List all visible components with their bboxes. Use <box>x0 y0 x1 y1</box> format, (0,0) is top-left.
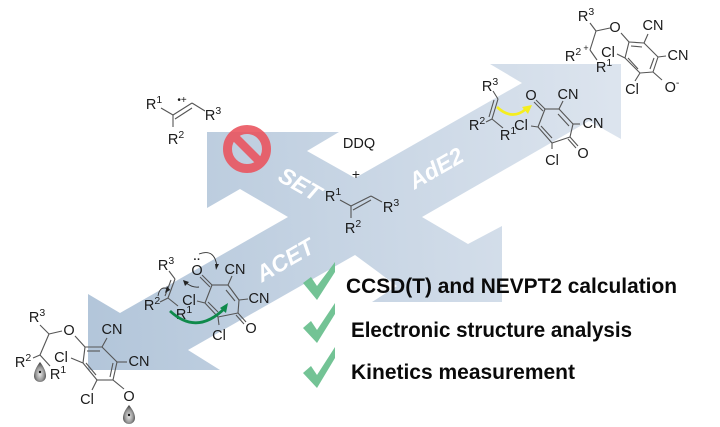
central alkene <box>325 186 399 237</box>
green curved arrow <box>170 303 228 323</box>
electronic structure text: Electronic structure analysis <box>351 319 632 342</box>
central alkene: R <box>325 189 335 205</box>
radical orbital lobe: oxygen <box>123 405 135 424</box>
DDQ complex, ACET path: CN <box>225 262 245 278</box>
AdE2 product: 2 <box>575 46 581 58</box>
DDQ complex, AdE2 path: 2 <box>479 115 485 127</box>
radical orbital lobe: alkyl <box>34 362 46 382</box>
AdE2 product: CN <box>668 48 688 64</box>
DDQ complex, ACET path: R <box>144 298 154 314</box>
plus sign: + <box>352 166 360 182</box>
ACET product: O <box>63 323 75 339</box>
three-way reaction arrows <box>88 64 621 370</box>
AdE2 product: O <box>665 80 676 96</box>
radical cation alkene: 2 <box>178 129 184 141</box>
DDQ complex, AdE2 path: R <box>469 118 479 134</box>
DDQ complex, AdE2 path: 3 <box>492 76 498 88</box>
ACET product: R <box>29 310 39 326</box>
DDQ complex, AdE2 path: R <box>482 79 492 95</box>
radical cation alkene: 3 <box>215 105 221 117</box>
small electron-pushing arrows <box>158 253 219 296</box>
DDQ complex, ACET path: R <box>158 258 168 274</box>
radical cation alkene: R <box>205 108 215 124</box>
DDQ complex, ACET path: 1 <box>186 304 192 316</box>
DDQ complex, ACET path: CN <box>249 291 269 307</box>
AdE2 product: 3 <box>588 6 594 18</box>
ACET product: Cl <box>54 350 68 366</box>
radical cation alkene <box>146 94 221 148</box>
DDQ complex, AdE2 path: CN <box>558 87 578 103</box>
DDQ complex, AdE2 path: Cl <box>545 153 559 169</box>
CCSD(T) text: CCSD(T) and NEVPT2 calculation <box>346 275 677 298</box>
yellow curved arrow <box>497 105 532 115</box>
DDQ complex, ACET path: Cl <box>212 328 226 344</box>
DDQ complex, AdE2 path: O <box>525 88 537 104</box>
AdE2 product: 1 <box>606 57 612 69</box>
central alkene: 2 <box>355 218 361 230</box>
AdE2 product: O <box>609 20 621 36</box>
AdE2 product: + <box>583 43 589 53</box>
DDQ complex, AdE2 path <box>469 76 603 169</box>
radical cation alkene: R <box>168 132 178 148</box>
DDQ complex, ACET path: 2 <box>154 295 160 307</box>
label: SET: SET <box>274 162 328 207</box>
central alkene: R <box>383 200 393 216</box>
central alkene: 1 <box>335 186 341 198</box>
AdE2 product: CN <box>643 18 663 34</box>
radical cation alkene: 1 <box>156 94 162 106</box>
ACET product: O <box>123 389 135 405</box>
ACET product: Cl <box>80 392 94 408</box>
AdE2 product: R <box>565 49 575 65</box>
radical cation alkene: R <box>146 97 156 113</box>
check mark 1 <box>303 262 335 300</box>
ACET product: 3 <box>39 307 45 319</box>
AdE2 product: R <box>578 9 588 25</box>
DDQ complex, AdE2 path: Cl <box>514 118 528 134</box>
DDQ complex, ACET path: O <box>191 263 203 279</box>
ACET product: CN <box>129 354 149 370</box>
DDQ complex, ACET path: 3 <box>168 255 174 267</box>
lone pair dots: ·· <box>193 254 201 266</box>
ACET product: 2 <box>25 352 31 364</box>
ACET product: R <box>50 367 60 383</box>
prohibition icon <box>228 130 266 168</box>
DDQ complex, ACET path: O <box>245 321 257 337</box>
DDQ complex, AdE2 path: R <box>500 128 510 144</box>
DDQ complex, ACET path: Cl <box>182 293 196 309</box>
DDQ label: DDQ <box>343 136 375 152</box>
ACET product: CN <box>102 322 122 338</box>
ACET product <box>15 307 149 424</box>
label: AdE2: AdE2 <box>403 142 468 195</box>
AdE2 product: - <box>676 77 680 89</box>
ACET product: R <box>15 355 25 371</box>
central alkene: R <box>345 221 355 237</box>
DDQ complex, ACET path: R <box>176 307 186 323</box>
AdE2 product: Cl <box>625 82 639 98</box>
ACET product: 1 <box>60 364 66 376</box>
check mark 2 <box>303 303 335 343</box>
label: ACET: ACET <box>251 232 320 287</box>
DDQ complex, AdE2 path: 1 <box>510 125 516 137</box>
central alkene: 3 <box>393 197 399 209</box>
DDQ complex, AdE2 path: CN <box>583 116 603 132</box>
radical cation alkene: •+ <box>177 95 187 106</box>
DDQ complex, ACET path <box>144 253 269 344</box>
DDQ complex, AdE2 path: O <box>577 146 589 162</box>
AdE2 product: R <box>596 60 606 76</box>
AdE2 product: Cl <box>601 45 615 61</box>
check mark 3 <box>303 347 335 388</box>
kinetics text: Kinetics measurement <box>351 361 575 384</box>
AdE2 product <box>565 6 688 98</box>
